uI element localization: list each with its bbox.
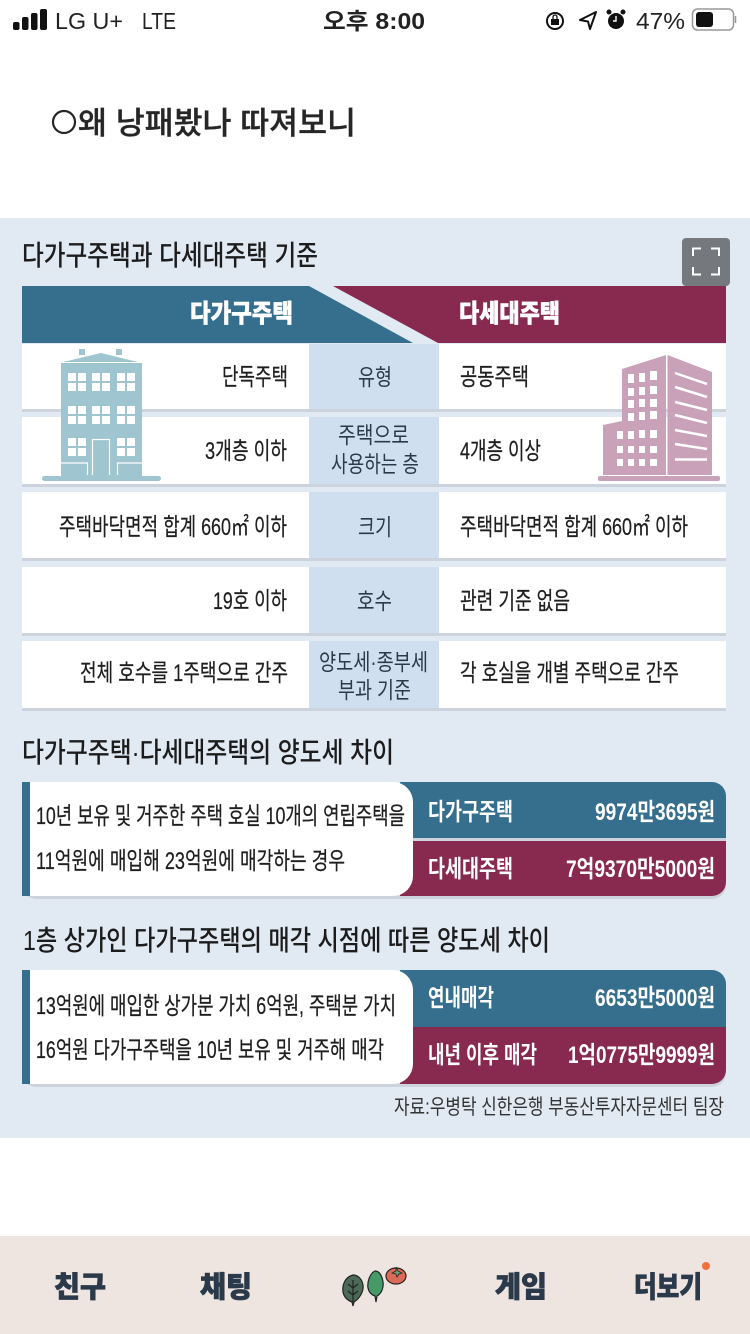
row 5: tax basis: 각 호실을 개별 주택으로 간주 xyxy=(460,660,679,687)
case description: 11억원에 매입해 23억원에 매각하는 경우 xyxy=(36,848,345,875)
value: sale next year or later: 내년 이후 매각 xyxy=(428,1042,537,1069)
tab: friends: 친구 xyxy=(54,1271,106,1304)
icon: high-rise building xyxy=(598,355,720,481)
value: sale next year or later xyxy=(428,1042,715,1069)
tab: games: 게임 xyxy=(495,1271,547,1304)
row 5: tax basis: 양도세·종부세 xyxy=(319,649,428,675)
comparison table rows xyxy=(22,344,726,711)
tab: more: 더보기 xyxy=(634,1271,702,1304)
value: multi-household: 다가구주택 xyxy=(428,799,513,826)
panel: infographic xyxy=(0,218,750,1138)
column title left: 다가구주택 xyxy=(190,300,293,328)
value: multi-household: 9974만3695원 xyxy=(595,799,715,826)
bottom tab bar xyxy=(0,1236,750,1334)
battery percent: 47% xyxy=(636,8,685,34)
icon: fullscreen button xyxy=(682,238,730,286)
case description: 13억원에 매입한 상가분 가치 6억원, 주택분 가치 xyxy=(36,993,396,1020)
article subheading: 왜 낭패봤나 따져보니 xyxy=(78,106,356,141)
value: sale within year: 6653만5000원 xyxy=(595,985,715,1012)
value: multi-household xyxy=(428,799,715,826)
case description: 16억원 다가구주택을 10년 보유 및 거주해 매각 xyxy=(36,1037,384,1064)
heading: timing of sale: 1층 상가인 다가구주택의 매각 시점에 따른 양도세 차이 xyxy=(23,925,550,956)
card: tax comparison xyxy=(22,782,726,899)
row 2: floors: 주택으로 xyxy=(338,422,409,448)
value: sale within year: 연내매각 xyxy=(428,985,494,1012)
row 2: floors: 3개층 이하 xyxy=(205,438,287,465)
row 5: tax basis xyxy=(80,649,679,703)
value: sale within year xyxy=(428,985,715,1012)
case description xyxy=(36,803,405,875)
row 1: type xyxy=(222,364,529,391)
value: multiplex xyxy=(428,856,715,883)
clock: 오후 8:00 xyxy=(323,8,425,34)
card: sale timing xyxy=(22,970,726,1087)
row 1: type: 공동주택 xyxy=(460,364,529,391)
row 3: size: 주택바닥면적 합계 660㎡ 이하 xyxy=(59,514,287,541)
icon: low-rise building xyxy=(42,349,161,481)
icon: alarm clock xyxy=(606,10,626,29)
carrier: LG U+ xyxy=(55,8,123,34)
row 2: floors xyxy=(205,422,541,477)
value: sale next year or later: 1억0775만9999원 xyxy=(568,1042,715,1069)
row 3: size xyxy=(59,514,688,541)
row 2: floors: 사용하는 층 xyxy=(331,451,419,477)
row 4: units: 19호 이하 xyxy=(213,588,287,615)
row 1: type: 단독주택 xyxy=(222,364,288,391)
column title right: 다세대주택 xyxy=(459,300,560,328)
value: multiplex: 7억9370만5000원 xyxy=(566,856,715,883)
icon: signal bars xyxy=(13,9,47,30)
icon: leaves and tomato xyxy=(343,1267,406,1306)
heading: capital gains tax difference: 다가구주택·다세대주택의 양도세 차이 xyxy=(22,737,394,768)
row 1: type: 유형 xyxy=(358,364,392,390)
tab: chat: 채팅 xyxy=(200,1271,252,1304)
case description: 10년 보유 및 거주한 주택 호실 10개의 연립주택을 xyxy=(36,803,405,830)
row 5: tax basis: 전체 호수를 1주택으로 간주 xyxy=(80,660,288,687)
row 2: floors: 4개층 이상 xyxy=(460,438,541,465)
case description xyxy=(36,993,396,1064)
table header xyxy=(22,286,726,343)
icon: battery xyxy=(692,9,736,30)
value: multiplex: 다세대주택 xyxy=(428,856,513,883)
row 5: tax basis: 부과 기준 xyxy=(338,677,411,703)
icon: location arrow xyxy=(580,12,596,29)
row 4: units xyxy=(213,588,570,615)
status bar xyxy=(13,8,736,34)
row 3: size: 크기 xyxy=(358,514,392,540)
heading: criteria: 다가구주택과 다세대주택 기준 xyxy=(22,240,318,271)
notification dot xyxy=(702,1262,710,1270)
row 4: units: 호수 xyxy=(357,588,392,614)
icon: rotation lock xyxy=(547,13,563,29)
network type: LTE xyxy=(142,8,176,34)
row 4: units: 관련 기준 없음 xyxy=(460,588,570,615)
